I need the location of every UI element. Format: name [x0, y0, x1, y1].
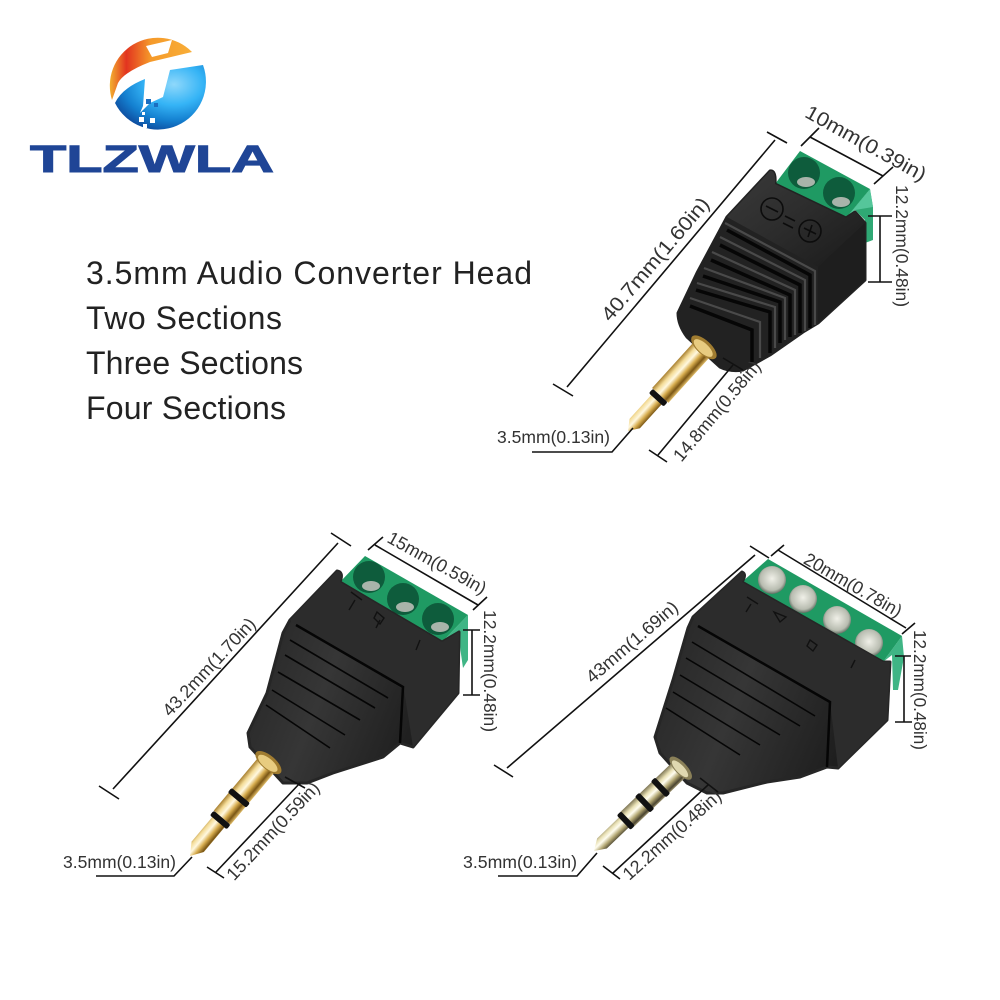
icon: logo globe	[110, 38, 206, 130]
dimension labels: 12.2mm(0.48in)	[480, 610, 500, 732]
black body	[248, 571, 459, 783]
dimension labels	[497, 102, 930, 465]
dimension labels: 12.2mm(0.48in)	[619, 786, 725, 884]
panel: four section adapter	[463, 545, 930, 884]
dimension labels: 3.5mm(0.13in)	[63, 852, 176, 872]
dimension lines	[96, 533, 487, 878]
heading and product list: Three Sections	[86, 345, 303, 381]
green terminal block	[742, 559, 904, 690]
logo	[30, 38, 274, 181]
dimension labels: 43mm(1.69in)	[582, 597, 682, 687]
polarity symbols	[761, 198, 821, 242]
panel: two section adapter	[497, 102, 930, 465]
logo wordmark: TLZWLA	[30, 139, 274, 181]
dimension labels: 20mm(0.78in)	[800, 549, 906, 621]
dimension lines	[532, 128, 893, 462]
dimension labels: 3.5mm(0.13in)	[497, 427, 610, 447]
dimension labels: 12.2mm(0.48in)	[892, 185, 912, 307]
gold mono plug	[616, 331, 720, 442]
dimension labels: 15.2mm(0.59in)	[222, 778, 324, 884]
black body	[655, 572, 890, 793]
dimension labels: 3.5mm(0.13in)	[463, 852, 577, 872]
black ribbed body	[678, 171, 865, 371]
dimension labels: 12.2mm(0.48in)	[910, 630, 930, 750]
dimension labels: 10mm(0.39in)	[801, 102, 930, 186]
green terminal block	[775, 151, 873, 243]
pin letters	[349, 592, 420, 650]
dimension labels: 43.2mm(1.70in)	[158, 614, 260, 720]
dimension labels	[463, 549, 930, 884]
heading and product list: Four Sections	[86, 390, 286, 426]
dimension labels: 14.8mm(0.58in)	[669, 357, 765, 465]
dimension labels	[63, 528, 500, 884]
TRRS plug	[584, 753, 695, 862]
panel: three section adapter	[63, 528, 500, 884]
heading and product list: Two Sections	[86, 300, 282, 336]
dimension labels: 15mm(0.59in)	[384, 528, 490, 598]
dimension lines	[494, 545, 915, 879]
heading and product list: 3.5mm Audio Converter Head	[86, 255, 532, 291]
heading and product list	[86, 255, 532, 426]
pin letters	[746, 597, 855, 668]
dimension labels: 40.7mm(1.60in)	[597, 193, 714, 326]
green terminal block	[340, 556, 468, 668]
gold stereo plug	[178, 747, 285, 866]
